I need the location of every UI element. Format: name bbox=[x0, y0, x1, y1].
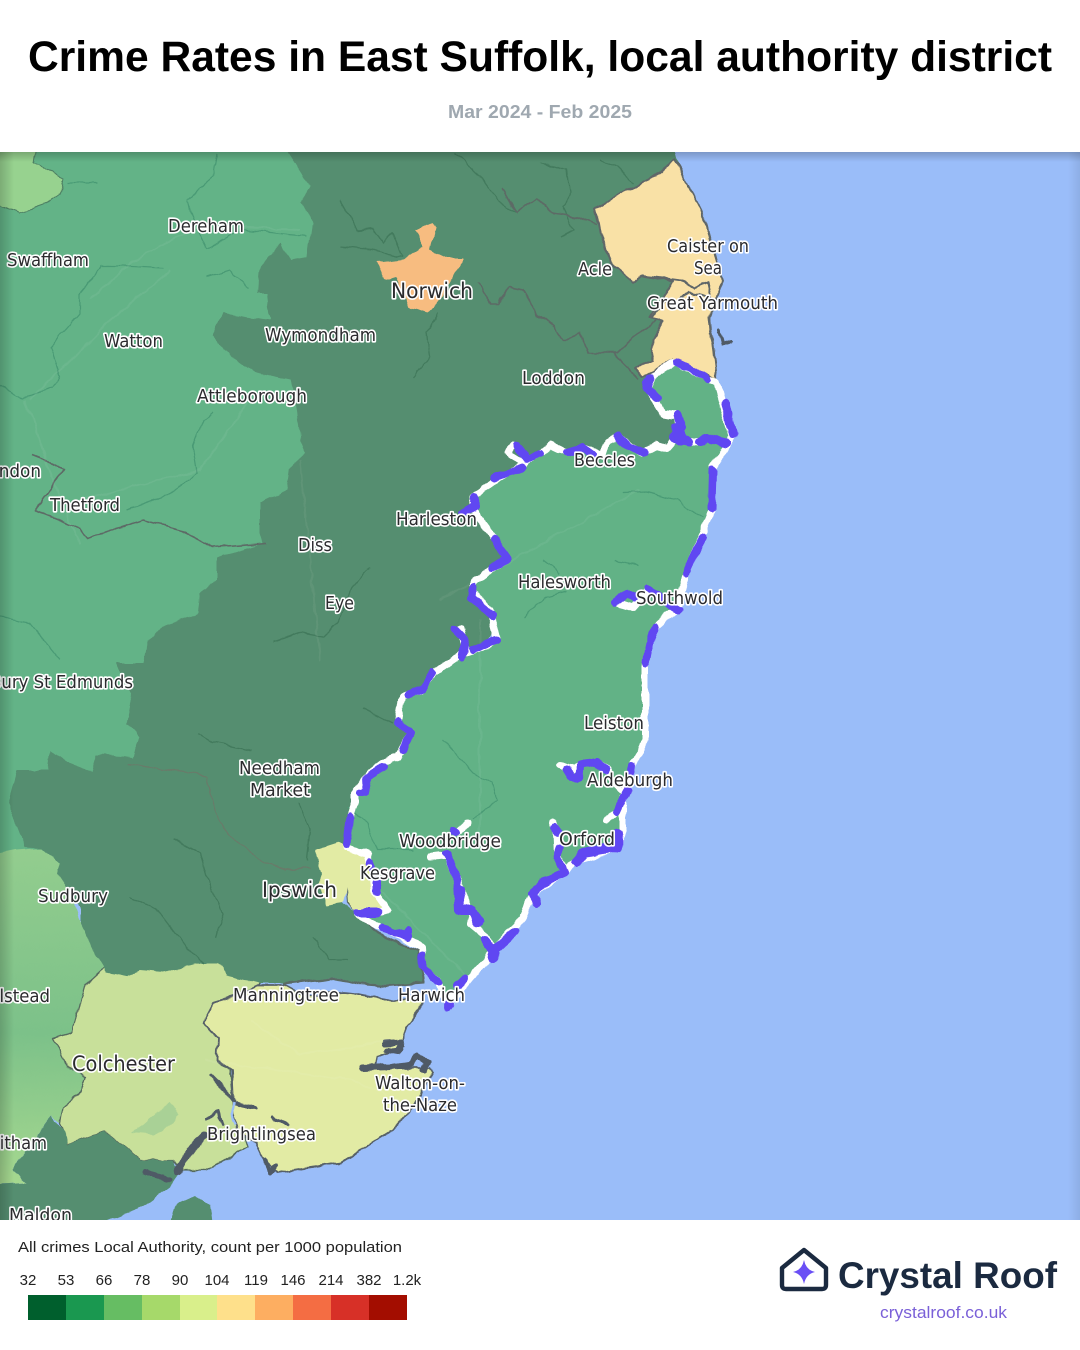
place labels: Acle bbox=[578, 260, 612, 280]
legend colour scale bbox=[28, 1295, 407, 1320]
place labels: Manningtree bbox=[233, 986, 339, 1006]
place labels: Harleston bbox=[396, 510, 477, 530]
region: East Suffolk bbox=[347, 362, 732, 1005]
place labels: Swaffham bbox=[7, 251, 89, 271]
place labels: the-Naze bbox=[383, 1096, 457, 1116]
region: Tendring bbox=[203, 985, 432, 1173]
place labels: Southwold bbox=[636, 589, 723, 609]
map edge shadows bbox=[0, 152, 1080, 1220]
legend title: All crimes Local Authority, count per 1000 population bbox=[18, 1239, 402, 1256]
logo: Crystal Roof bbox=[782, 1250, 1058, 1322]
place labels: Sea bbox=[694, 259, 722, 279]
title: Crime Rates in East Suffolk, local authority district bbox=[28, 33, 1052, 81]
subtitle: date range: Mar 2024 - Feb 2025 bbox=[448, 101, 632, 122]
place labels: Colchester bbox=[72, 1052, 175, 1076]
place labels: Wymondham bbox=[265, 326, 376, 346]
sea bbox=[0, 152, 1080, 1220]
region: Norwich bbox=[377, 222, 463, 313]
East Suffolk boundary: white line bbox=[347, 362, 732, 1005]
place labels: Loddon bbox=[522, 369, 585, 389]
shoreline: Stour south edge bbox=[283, 887, 423, 986]
rivers in mid and East Suffolk districts bbox=[0, 153, 703, 850]
region: Great Yarmouth bbox=[595, 160, 722, 380]
place labels bbox=[0, 217, 778, 1226]
place labels: Halesworth bbox=[518, 573, 611, 593]
legend bbox=[18, 1239, 422, 1320]
place labels: Kesgrave bbox=[360, 864, 435, 884]
region: mid green districts west bbox=[0, 152, 314, 864]
legend values: 66 bbox=[96, 1272, 112, 1289]
district boundary Mid Suffolk bbox=[128, 763, 310, 870]
marshes and estuaries bbox=[145, 330, 732, 1180]
place labels: Harwich bbox=[398, 986, 465, 1006]
region: Braintree lighter green bbox=[0, 848, 107, 1185]
place labels: Eye bbox=[325, 594, 354, 614]
icon: house with star bbox=[782, 1250, 826, 1289]
place labels: Aldeburgh bbox=[587, 771, 673, 791]
place labels: Dereham bbox=[168, 217, 244, 237]
place labels: Woodbridge bbox=[399, 832, 501, 852]
rivers in dark districts bbox=[130, 153, 633, 963]
legend values: 214 bbox=[318, 1272, 344, 1289]
legend values: 382 bbox=[356, 1272, 382, 1289]
website: crystalroof.co.uk bbox=[880, 1304, 1008, 1322]
place labels: Great Yarmouth bbox=[647, 294, 778, 314]
place labels: Sudbury bbox=[38, 887, 108, 907]
region: dark green districts bbox=[8, 140, 695, 985]
place labels: Brightlingsea bbox=[207, 1125, 316, 1145]
logo wordmark: Crystal Roof bbox=[838, 1255, 1058, 1296]
legend values bbox=[20, 1272, 422, 1289]
place labels: Ipswich bbox=[262, 878, 337, 902]
region: Maldon dark green bbox=[0, 1116, 178, 1220]
place labels: Watton bbox=[104, 332, 163, 352]
place labels: Orford bbox=[559, 830, 615, 850]
place labels: Walton-on- bbox=[375, 1074, 465, 1094]
district boundary lines bbox=[32, 188, 657, 547]
region: Mersea island bbox=[170, 1196, 212, 1220]
legend values: 78 bbox=[134, 1272, 150, 1289]
legend values: 1.2k bbox=[393, 1272, 422, 1289]
place labels: Thetford bbox=[49, 496, 120, 516]
legend values: 90 bbox=[172, 1272, 188, 1289]
place labels: Maldon bbox=[9, 1206, 72, 1226]
map land and boundaries bbox=[0, 140, 733, 1232]
place labels: Attleborough bbox=[197, 387, 307, 407]
place labels: Needham bbox=[239, 759, 320, 779]
legend values: 146 bbox=[280, 1272, 306, 1289]
East Suffolk boundary: purple dashes bbox=[347, 362, 733, 1007]
place labels: Beccles bbox=[574, 451, 635, 471]
region: Colchester bbox=[53, 960, 260, 1170]
region: Colchester green patch bbox=[133, 1103, 180, 1135]
place labels: Norwich bbox=[391, 279, 473, 303]
place labels: Caister on bbox=[667, 237, 749, 257]
legend values: 119 bbox=[244, 1272, 268, 1289]
legend values: 53 bbox=[58, 1272, 74, 1289]
legend values: 104 bbox=[204, 1272, 230, 1289]
place labels: Market bbox=[250, 781, 310, 801]
Yarmouth river Yare bbox=[642, 275, 710, 317]
place labels: Diss bbox=[298, 536, 332, 556]
Colne blue channel bbox=[232, 1102, 236, 1125]
region: Ipswich bbox=[315, 842, 382, 910]
legend values: 32 bbox=[20, 1272, 36, 1289]
roads bbox=[25, 225, 640, 1100]
place labels: Leiston bbox=[584, 714, 644, 734]
region: north-west lighter corner bbox=[0, 152, 64, 214]
